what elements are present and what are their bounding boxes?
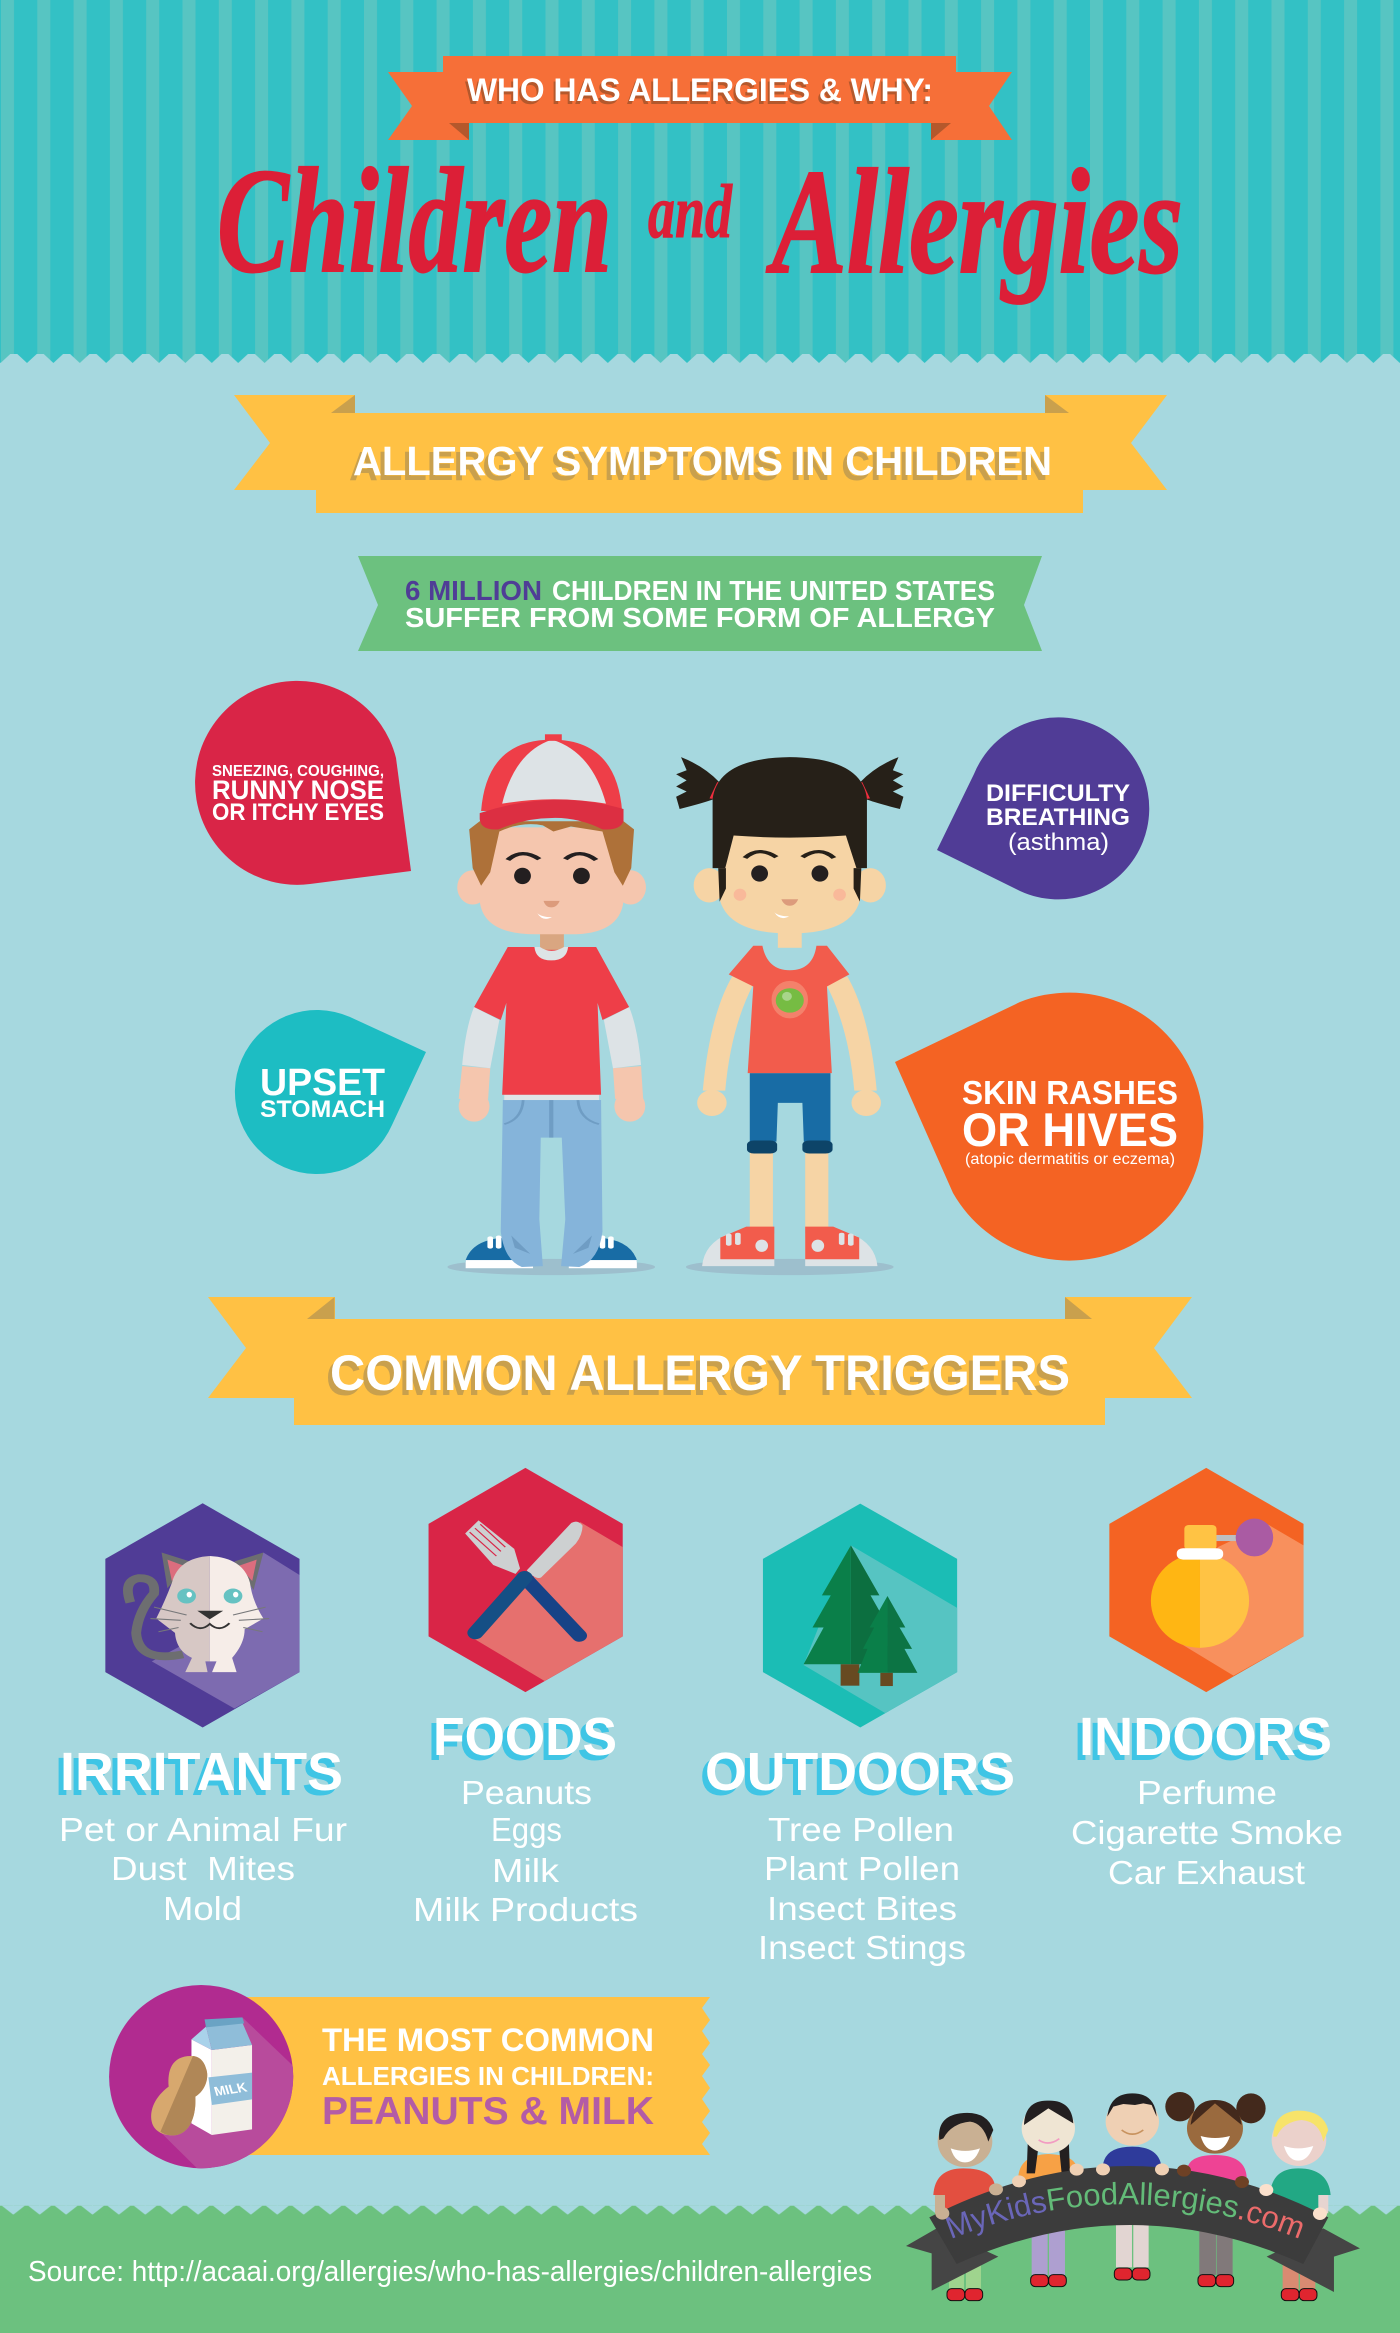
icon: trees hexagon [763,1504,957,1727]
category: foods [413,1707,638,1928]
bubble: stomach: STOMACH [260,1096,385,1123]
category: irritants: Pet or Animal Fur [59,1811,347,1848]
category: irritants: IRRITANTS [60,1742,343,1802]
icon: cat hexagon [105,1503,300,1727]
bubble: skin: (atopic dermatitis or eczema) [965,1151,1175,1168]
header ribbon [388,56,1012,140]
bubble: skin [895,993,1203,1261]
kid 1 [933,2113,995,2290]
title: Children [217,138,612,304]
icon: milk and peanut: MILK [212,2080,249,2099]
statistic ribbon [358,556,1042,651]
bubble: skin: OR HIVES [962,1103,1178,1156]
category: outdoors [700,1742,1015,1966]
kid 5 [1270,2111,1331,2290]
icon: milk and peanut [109,1985,296,2170]
category: indoors [1071,1707,1343,1891]
category: indoors: INDOORS [1074,1712,1327,1772]
kid 4 [1165,2092,1266,2275]
bubble: sneezing: SNEEZING, COUGHING, [212,763,384,780]
heading ribbon: allergy symptoms: ALLERGY SYMPTOMS IN CHILDREN [349,443,1048,489]
category: foods: FOODS [428,1712,612,1772]
kid 2 [1018,2101,1077,2275]
heading ribbon: allergy symptoms: ALLERGY SYMPTOMS IN CHILDREN [353,438,1052,484]
category: irritants: Dust Mites [111,1850,295,1887]
category: foods: Eggs [491,1811,562,1848]
bubble: stomach [235,1010,426,1174]
bubble: breathing: BREATHING [986,804,1130,831]
hands [935,2163,1327,2220]
category: irritants: Mold [163,1890,242,1927]
category: foods: Peanuts [461,1774,592,1811]
girl figure [676,757,903,1275]
banner [906,2166,1360,2292]
bubble: sneezing: RUNNY NOSE [212,775,384,805]
bubble: sneezing [195,681,411,885]
title: Allergies [766,139,1183,305]
heading ribbon: triggers: COMMON ALLERGY TRIGGERS [330,1345,1070,1401]
callout: most common allergies: ALLERGIES IN CHILDREN: [322,2061,654,2091]
category: outdoors: Tree Pollen [768,1811,954,1848]
statistic ribbon: SUFFER FROM SOME FORM OF ALLERGY [405,602,995,633]
category: irritants [55,1742,347,1927]
callout: most common allergies [240,1997,710,2155]
category: indoors: Perfume [1137,1774,1277,1811]
statistic ribbon: 6 MILLION [405,575,542,606]
boy figure [447,734,655,1275]
bubble: breathing: (asthma) [1008,829,1109,856]
bubble: skin: SKIN RASHES [962,1074,1178,1111]
category: outdoors: OUTDOORS [700,1747,1010,1807]
source text: Source: http://acaai.org/allergies/who-has-allergies/children-allergies [28,2256,872,2288]
category: irritants: IRRITANTS [55,1747,338,1807]
logo: MyKidsFoodAllergies [906,2092,1360,2302]
bubble: breathing: DIFFICULTY [986,780,1130,807]
category: outdoors: Insect Bites [767,1890,957,1927]
icon: cutlery hexagon [429,1468,623,1692]
category: foods: FOODS [433,1707,617,1767]
category: indoors: INDOORS [1079,1707,1332,1767]
heading ribbon: allergy symptoms [234,395,1167,513]
category: outdoors: OUTDOORS [705,1742,1015,1802]
banner: MyKidsFoodAllergies.com [946,2182,1302,2238]
bubble: stomach: UPSET [260,1062,385,1104]
statistic ribbon: CHILDREN IN THE UNITED STATES [552,575,995,606]
heading ribbon: triggers [208,1297,1192,1425]
category: foods: Milk [492,1852,560,1889]
bubble: breathing [937,717,1149,899]
category: indoors: Car Exhaust [1108,1854,1305,1891]
header ribbon: WHO HAS ALLERGIES & WHY: [467,72,933,108]
bubble: sneezing: OR ITCHY EYES [212,799,384,826]
category: foods: Milk Products [413,1891,638,1928]
title [217,138,1183,305]
heading ribbon: triggers: COMMON ALLERGY TRIGGERS [326,1350,1066,1406]
header ribbon: WHO HAS ALLERGIES & WHY: [465,75,931,111]
callout: most common allergies: PEANUTS & MILK [322,2090,654,2133]
category: outdoors: Plant Pollen [764,1850,960,1887]
shoes [947,2268,1317,2301]
icon: perfume hexagon [1109,1468,1304,1692]
title: and [648,170,733,254]
kid 3 [1103,2093,1162,2267]
callout: most common allergies: THE MOST COMMON [322,2022,654,2058]
category: outdoors: Insect Stings [758,1929,966,1966]
category: indoors: Cigarette Smoke [1071,1814,1343,1851]
